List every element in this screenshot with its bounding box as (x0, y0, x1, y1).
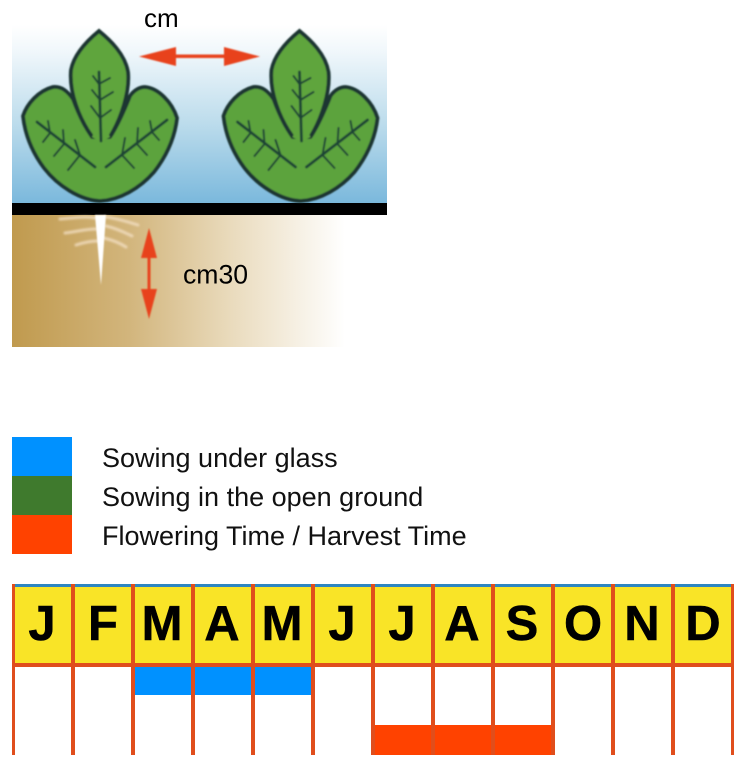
spacing label: cm (144, 3, 179, 33)
month initials: A (444, 597, 480, 651)
spacing arrow (139, 47, 260, 66)
month initials: A (204, 597, 240, 651)
icon: root (60, 215, 138, 285)
top edge (12, 584, 734, 587)
legend (12, 437, 467, 554)
month initials: J (388, 597, 416, 651)
month initials: S (506, 597, 538, 651)
month initials: D (685, 597, 721, 651)
month header background (12, 587, 734, 664)
legend swatch: flowering and harvest time (12, 515, 72, 554)
month initials (28, 597, 721, 651)
month initials: O (564, 597, 602, 651)
depth arrow (141, 228, 157, 319)
legend label: sowing in the open ground: Sowing in the open ground (102, 482, 423, 512)
ground line (12, 203, 387, 215)
icon: right plant (224, 31, 378, 201)
month initials: J (28, 597, 56, 651)
legend swatch: sowing under glass (12, 437, 72, 476)
legend label: flowering and harvest time: Flowering Time / Harvest Time (102, 521, 467, 551)
soil panel (12, 215, 345, 347)
month initials: N (624, 597, 660, 651)
harvest bar (371, 725, 555, 755)
calendar (12, 584, 734, 755)
sky panel (12, 25, 387, 204)
month initials: J (328, 597, 356, 651)
month initials: M (142, 597, 182, 651)
legend swatch: sowing in the open ground (12, 476, 72, 515)
month initials: M (262, 597, 302, 651)
legend label: sowing under glass: Sowing under glass (102, 443, 338, 473)
calendar grid (12, 584, 734, 755)
icon: left plant (23, 31, 177, 201)
month initials: F (88, 597, 118, 651)
sowing under glass bar (135, 667, 311, 695)
depth label: cm30 (183, 260, 248, 290)
